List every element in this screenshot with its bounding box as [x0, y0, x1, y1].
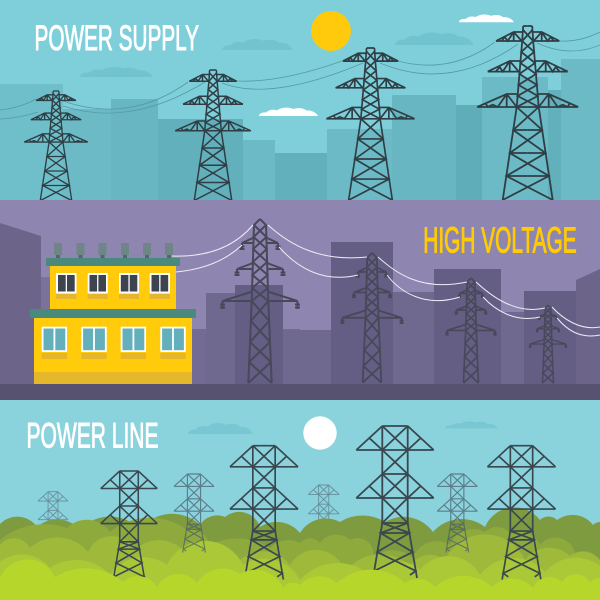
trees: front layer [0, 559, 600, 600]
white clouds [259, 14, 514, 116]
faded clouds [80, 32, 474, 77]
icon: moon [303, 416, 337, 450]
panel: high voltage [0, 200, 600, 400]
trees: back layer [0, 507, 600, 600]
city skyline [0, 59, 600, 200]
walls [50, 266, 176, 310]
panel: power line [0, 400, 600, 600]
rooftop insulators [54, 243, 173, 258]
power wires [172, 225, 600, 336]
far pylon towers [38, 485, 339, 551]
near pylon towers [101, 426, 556, 582]
pylon towers [220, 219, 567, 383]
power wires [0, 32, 600, 119]
lower windows [42, 327, 186, 359]
building: substation [30, 243, 196, 384]
panel: power supply [0, 0, 600, 201]
pylon towers [24, 26, 578, 201]
upper windows [56, 273, 170, 299]
trees: third layer [0, 534, 600, 600]
heading: POWER LINE [26, 417, 158, 456]
roofs [46, 258, 180, 266]
icon: sun [311, 11, 351, 51]
ground [0, 384, 600, 400]
heading: POWER SUPPLY [34, 19, 199, 58]
mid pylon towers [174, 474, 477, 553]
faded clouds [188, 421, 498, 434]
city skyline [0, 223, 600, 384]
trees: second layer [0, 518, 600, 600]
trees: fourth layer [0, 541, 600, 600]
